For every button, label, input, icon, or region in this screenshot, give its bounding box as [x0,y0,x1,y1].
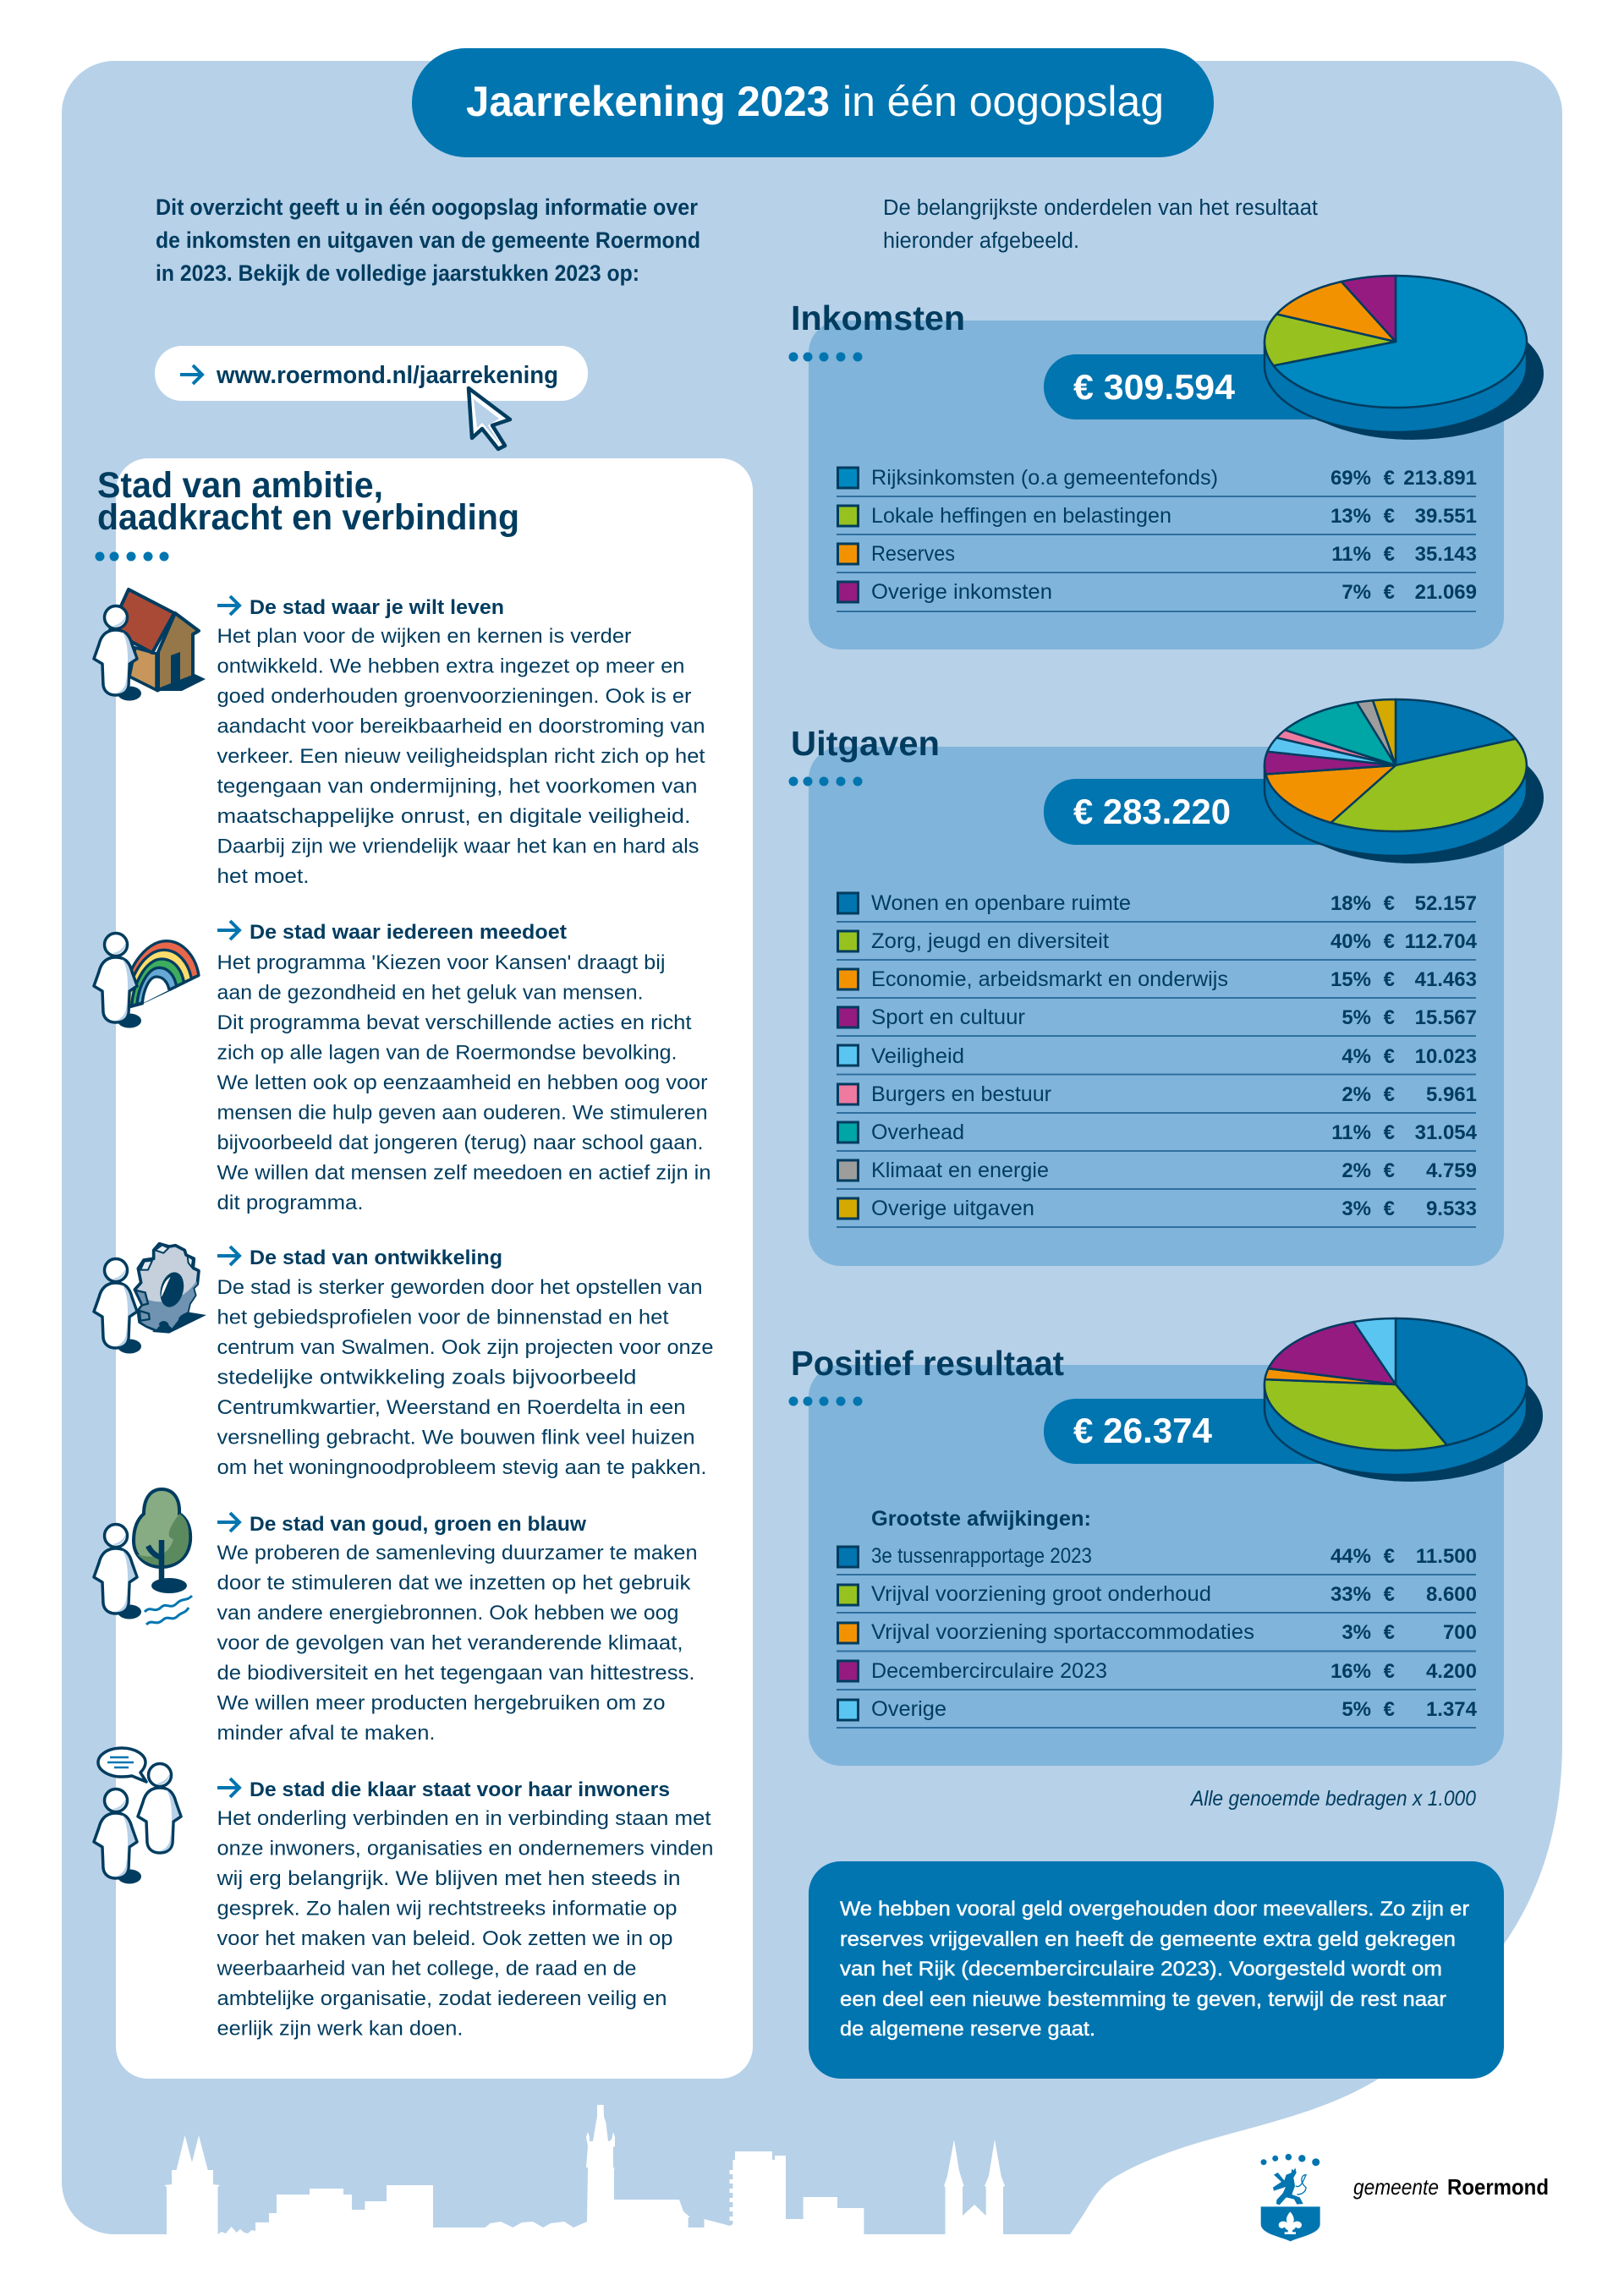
section text: eerlijk zijn werk kan doen. [217,2018,464,2040]
legend: positief resultaat: 8.600 [1426,1583,1477,1606]
legend: inkomsten: 39.551 [1415,505,1477,528]
intro text left: Dit overzicht geeft u in één oogopslag informatie over [156,195,698,220]
legend: uitgaven: € [1384,892,1395,915]
legend: uitgaven: 40% [1330,930,1371,953]
legend: positief resultaat: € [1384,1660,1395,1683]
title banner [412,48,1214,157]
legend: inkomsten: Overige inkomsten [871,580,1052,604]
legend: uitgaven: € [1384,1121,1395,1144]
icon: coat of arms [1260,2154,1320,2241]
panel: uitgaven [788,699,1544,1266]
legend: uitgaven: 15.567 [1415,1006,1477,1029]
website link pill [155,346,588,401]
legend: uitgaven [837,891,1478,1227]
icon: arrow [217,921,239,940]
section text: maatschappelijke onrust, en digitale veiligheid. [217,805,690,828]
legend: uitgaven: € [1384,1083,1395,1106]
section text: mensen die hulp geven aan ouderen. We stimuleren [217,1101,707,1125]
callout: explanation: van het Rijk (decembercirculaire 2023). Voorgesteld wordt om [840,1958,1442,1981]
legend: uitgaven: Wonen en openbare ruimte [871,891,1131,915]
section text: versnelling gebracht. We bouwen flink veel huizen [217,1426,694,1449]
legend: positief resultaat: Vrijval voorziening groot onderhoud [871,1582,1211,1606]
section heading: De stad van ontwikkeling [250,1247,502,1269]
total amount pill: € 309.594 [1073,367,1236,407]
heading: stad van ambitie [97,465,519,538]
legend: positief resultaat: 4.200 [1426,1660,1477,1683]
legend: inkomsten: € [1384,581,1395,604]
logo: gemeente Roermond [1260,2154,1549,2241]
legend: uitgaven: 2% [1341,1159,1371,1182]
section: de stad die klaar staat voor haar inwoners [94,1748,714,2040]
intro text right [883,196,1318,253]
section text: minder afval te maken. [217,1722,435,1745]
legend: positief resultaat: € [1384,1698,1395,1721]
legend: positief resultaat: 3e tussenrapportage 2023 [871,1544,1092,1568]
legend: positief resultaat: 3% [1341,1621,1371,1644]
legend: uitgaven: Klimaat en energie [871,1159,1049,1182]
section text: door te stimuleren dat we inzetten op het gebruik [217,1571,691,1595]
legend: uitgaven: 5% [1341,1006,1371,1029]
legend: uitgaven: 10.023 [1415,1045,1477,1068]
heading: positief resultaat: Positief resultaat [791,1344,1064,1383]
dots [788,352,863,362]
section text: stedelijke ontwikkeling zoals bijvoorbeeld [217,1367,636,1389]
section text: voor het maken van beleid. Ook zetten we in op [217,1927,673,1950]
legend: positief resultaat: Decembercirculaire 2023 [871,1659,1107,1683]
legend: positief resultaat: Vrijval voorziening sportaccommodaties [871,1620,1254,1644]
icon: rainbow and person [94,934,199,1028]
legend: inkomsten: Reserves [871,542,955,566]
heading: stad van ambitie: daadkracht en verbinding [97,497,519,538]
section text: het moet. [217,865,310,888]
legend: uitgaven: 9.533 [1426,1197,1477,1220]
section text: De stad is sterker geworden door het opstellen van [217,1276,702,1299]
legend: positief resultaat: € [1384,1545,1395,1568]
legend: uitgaven: 15% [1330,968,1371,991]
legend: uitgaven: 2% [1341,1083,1371,1106]
section text: van andere energiebronnen. Ook hebben we oog [217,1602,678,1625]
heading: stad van ambitie: Stad van ambitie, [97,465,383,506]
icon: house and person [94,589,206,700]
section text: Dit programma bevat verschillende acties en richt [217,1011,692,1034]
legend: positief resultaat: Grootste afwijkingen: [871,1507,1091,1531]
section text: We willen meer producten hergebruiken om zo [217,1691,665,1715]
intro text right: De belangrijkste onderdelen van het resultaat [883,196,1318,220]
title text: in één oogopslag [842,78,1164,125]
section text [217,951,710,1214]
heading: inkomsten: Inkomsten [791,299,965,337]
logo text: Roermond [1447,2174,1549,2200]
section text: voor de gevolgen van het veranderende klimaat, [217,1632,683,1654]
title text [466,78,1164,125]
icon: arrow [180,365,202,384]
section heading: De stad waar je wilt leven [250,596,504,619]
icon: arrow [217,1778,239,1797]
white panel: city themes [116,458,753,2079]
icon: two people talking [94,1748,181,1884]
legend: uitgaven: € [1384,930,1395,953]
section text [217,625,705,888]
icon: gear and person [94,1244,206,1353]
legend: uitgaven: € [1384,1197,1395,1220]
section text [217,1542,697,1745]
icon: arrow [217,1513,239,1532]
callout: explanation [809,1861,1504,2079]
legend: positief resultaat [837,1507,1478,1728]
total amount pill [1044,354,1382,419]
section: de stad van ontwikkeling [94,1244,714,1479]
dots [788,776,863,786]
icon: arrow [217,596,239,615]
callout: explanation: reserves vrijgevallen en heeft de gemeente extra geld gekregen [840,1928,1456,1951]
callout: explanation: de algemene reserve gaat. [840,2018,1095,2041]
section text: ontwikkeld. We hebben extra ingezet op meer en [217,655,685,678]
legend: positief resultaat: 16% [1330,1660,1371,1683]
section text: Daarbij zijn we vriendelijk waar het kan en hard als [217,836,699,858]
section text: goed onderhouden groenvoorzieningen. Ook is er [217,685,692,708]
legend: uitgaven: Zorg, jeugd en diversiteit [871,929,1109,953]
section text: weerbaarheid van het college, de raad en de [216,1957,637,1981]
legend: uitgaven: Economie, arbeidsmarkt en onderwijs [871,967,1228,991]
legend: uitgaven: € [1384,1159,1395,1182]
section heading: De stad die klaar staat voor haar inwoners [250,1778,670,1801]
section text: ambtelijke organisatie, zodat iedereen veilig en [217,1987,667,2010]
intro text right: hieronder afgebeeld. [883,229,1079,253]
section text: het gebiedsprofielen voor de binnenstad en het [217,1306,669,1329]
legend: inkomsten: € [1384,467,1395,490]
section text: dit programma. [217,1192,364,1214]
legend: uitgaven: 18% [1330,892,1371,915]
callout: explanation: We hebben vooral geld overgehouden door meevallers. Zo zijn er [840,1898,1469,1921]
section: de stad waar iedereen meedoet [94,921,710,1214]
legend: uitgaven: 31.054 [1415,1121,1478,1144]
legend: positief resultaat: 5% [1341,1698,1371,1721]
section text: aan de gezondheid en het geluk van mensen. [217,981,643,1005]
section text [216,1807,713,2040]
total amount pill [1044,1399,1382,1464]
dots [788,1397,863,1406]
legend: positief resultaat: 700 [1443,1621,1477,1644]
legend: uitgaven: 41.463 [1415,968,1477,991]
section text: tegengaan van ondermijning, het voorkomen van [217,775,697,798]
legend: positief resultaat: 33% [1330,1583,1371,1606]
legend: uitgaven: 4.759 [1426,1159,1477,1182]
legend: uitgaven: 11% [1331,1121,1371,1144]
intro text left [156,195,700,286]
legend: uitgaven: 3% [1341,1197,1371,1220]
section heading: De stad van goud, groen en blauw [250,1513,587,1536]
section text: om het woningnoodprobleem stevig aan te pakken. [217,1456,707,1479]
section text: bijvoorbeeld dat jongeren (terug) naar school gaan. [217,1132,704,1154]
section text: Het programma 'Kiezen voor Kansen' draagt bij [217,951,665,974]
logo text [1353,2174,1549,2200]
footnote: Alle genoemde bedragen x 1.000 [1189,1787,1476,1811]
logo text: gemeente [1353,2174,1439,2200]
legend: inkomsten: Rijksinkomsten (o.a gemeentefonds) [871,466,1218,490]
legend: uitgaven: Sport en cultuur [871,1006,1025,1029]
section text: gesprek. Zo halen wij rechtstreeks informatie op [217,1898,677,1920]
total amount pill: € 26.374 [1073,1411,1213,1450]
icon: mouse cursor [469,388,510,449]
section text: We proberen de samenleving duurzamer te maken [217,1542,697,1564]
section text: We letten ook op eenzaamheid en hebben oog voor [217,1071,707,1094]
skyline of Roermond [164,2105,1005,2235]
section text [217,1276,714,1479]
legend: uitgaven: € [1384,1006,1395,1029]
panel: positief resultaat [788,1318,1543,1766]
legend: inkomsten: 213.891 [1403,467,1477,490]
legend: positief resultaat: Overige [871,1697,946,1721]
section text: aandacht voor bereikbaarheid en doorstroming van [217,715,705,737]
legend: inkomsten [837,466,1477,611]
legend: positief resultaat: 1.374 [1426,1698,1478,1721]
dots [95,551,169,562]
legend: uitgaven: 4% [1341,1045,1371,1068]
pie chart: positief resultaat [1265,1318,1543,1482]
legend: inkomsten: € [1384,505,1395,528]
legend: inkomsten: 21.069 [1415,581,1477,604]
section text: wij erg belangrijk. We blijven met hen steeds in [216,1867,680,1890]
intro text left: in 2023. Bekijk de volledige jaarstukken 2023 op: [156,260,639,286]
legend: uitgaven: Burgers en bestuur [871,1082,1051,1106]
legend: positief resultaat: 11.500 [1416,1545,1477,1568]
legend: inkomsten: € [1384,543,1395,566]
legend: inkomsten: 13% [1330,505,1371,528]
total amount pill: € 283.220 [1073,792,1231,831]
legend: positief resultaat: € [1384,1621,1395,1644]
section text: zich op alle lagen van de Roermondse bevolking. [217,1042,677,1064]
pie chart: uitgaven [1265,699,1544,863]
icon: tree, water and person [94,1489,192,1625]
section: de stad waar je wilt leven [94,589,705,888]
title text: Jaarrekening 2023 [466,78,830,125]
total amount pill [1044,779,1382,845]
section text: Het onderling verbinden en in verbinding staan met [217,1807,711,1830]
legend: uitgaven: 5.961 [1426,1083,1477,1106]
legend: uitgaven: Overhead [871,1121,964,1144]
legend: inkomsten: Lokale heffingen en belastingen [871,504,1171,528]
legend: uitgaven: € [1384,1045,1395,1068]
legend: inkomsten: 11% [1331,543,1371,566]
panel: inkomsten [788,276,1544,649]
section text: verkeer. Een nieuw veiligheidsplan richt zich op het [217,745,705,768]
section text: Centrumkwartier, Weerstand en Roerdelta in een [217,1396,685,1419]
intro text left: de inkomsten en uitgaven van de gemeente Roermond [156,227,700,253]
section text: de biodiversiteit en het tegengaan van hittestress. [217,1662,695,1685]
heading: uitgaven: Uitgaven [791,724,940,763]
legend: uitgaven: Veiligheid [871,1044,964,1068]
section text: Het plan voor de wijken en kernen is verder [217,625,631,648]
section: de stad van goud, groen en blauw [94,1489,697,1745]
section heading: De stad waar iedereen meedoet [250,921,567,944]
legend: uitgaven: € [1384,968,1395,991]
section text: We willen dat mensen zelf meedoen en actief zijn in [217,1162,710,1184]
pie chart: inkomsten [1265,276,1544,440]
legend: inkomsten: 35.143 [1415,543,1477,566]
section text: centrum van Swalmen. Ook zijn projecten voor onze [217,1336,714,1359]
legend: positief resultaat: € [1384,1583,1395,1606]
legend: inkomsten: 7% [1341,581,1371,604]
legend: uitgaven: 112.704 [1405,930,1478,953]
legend: inkomsten: 69% [1330,467,1371,490]
section text: onze inwoners, organisaties en ondernemers vinden [217,1837,714,1860]
legend: uitgaven: 52.157 [1415,892,1477,915]
website link pill: www.roermond.nl/jaarrekening [216,362,558,389]
callout: explanation: een deel een nieuwe bestemming te geven, terwijl de rest naar [840,1988,1446,2011]
legend: uitgaven: Overige uitgaven [871,1197,1034,1220]
legend: positief resultaat: 44% [1330,1545,1371,1568]
icon: arrow [217,1247,239,1265]
